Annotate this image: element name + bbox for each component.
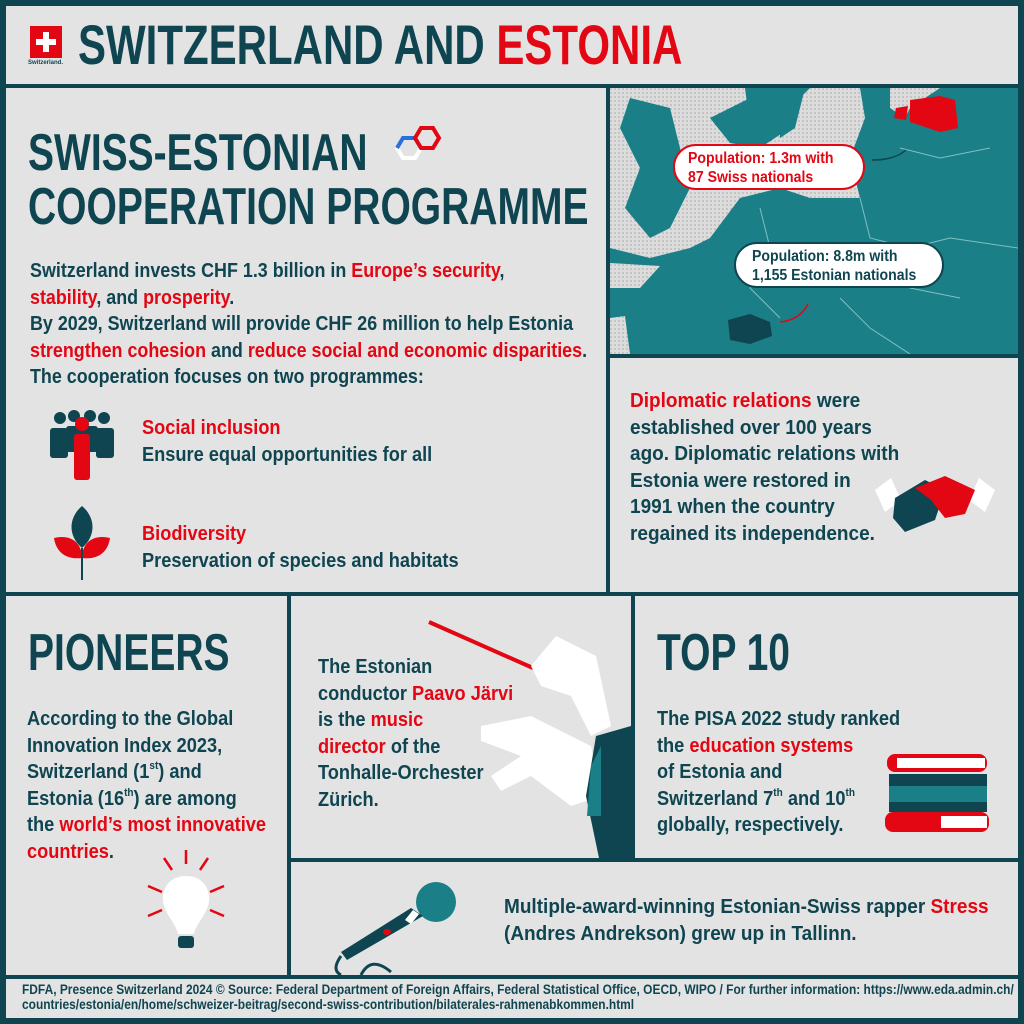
icon: swiss flag logo: Switzerland. — [28, 60, 63, 66]
text block: the education systems — [657, 734, 853, 756]
panel: rapper — [291, 862, 1018, 975]
text block: 1991 when the country — [630, 496, 835, 518]
callout: switzerland population: Population: 8.8m with — [752, 248, 898, 265]
callout: switzerland population — [734, 242, 944, 288]
text block: regained its independence. — [630, 522, 875, 544]
icon: handshake — [875, 476, 995, 532]
callout: estonia population — [673, 144, 865, 190]
text block — [318, 656, 513, 810]
text block: countries. — [27, 840, 114, 862]
icon: linked hexagons — [394, 126, 442, 160]
text block: Zürich. — [318, 788, 379, 810]
text block: intro: The cooperation focuses on two programmes: — [30, 366, 424, 388]
footer — [6, 979, 1018, 1018]
text: social inclusion — [142, 417, 432, 466]
text block: Estonia (16th) are among — [27, 786, 237, 810]
text: social inclusion: Ensure equal opportunities for all — [142, 444, 432, 466]
callout: estonia population: 87 Swiss nationals — [688, 169, 813, 186]
text block: Diplomatic relations were — [630, 390, 860, 412]
icon: books — [885, 754, 989, 832]
text block: ago. Diplomatic relations with — [630, 443, 899, 465]
panel: map — [610, 88, 1018, 354]
heading — [28, 124, 588, 236]
text block: The Estonian — [318, 656, 432, 678]
footer: countries/estonia/en/home/schweizer-beitrag/second-swiss-contribution/bilaterales-rahmenabkommen.html — [22, 997, 634, 1012]
text: biodiversity: Biodiversity — [142, 523, 246, 545]
text block: The PISA 2022 study ranked — [657, 708, 900, 730]
text block: Switzerland (1st) and — [27, 760, 202, 783]
text block: intro: stability, and prosperity. — [30, 286, 234, 308]
callout: estonia population: Population: 1.3m with — [688, 150, 834, 167]
icon: light bulb — [148, 850, 224, 948]
text block: intro: Switzerland invests CHF 1.3 billion in Europe’s security, — [30, 260, 504, 282]
text block — [630, 390, 899, 544]
text block — [657, 708, 900, 836]
text block: According to the Global — [27, 708, 233, 730]
icon: leaf — [54, 506, 110, 580]
text block: intro: strengthen cohesion and reduce social and economic disparities. — [30, 340, 587, 362]
icon: conductor hands — [428, 620, 631, 858]
text block: intro — [30, 260, 587, 388]
heading: SWISS-ESTONIAN — [28, 124, 367, 182]
icon: swiss flag logo — [28, 26, 63, 66]
text block: Multiple-award-winning Estonian-Swiss rapper Stress — [504, 896, 989, 918]
panel: cooperation programme — [6, 88, 606, 592]
icon: people — [50, 410, 114, 480]
text: biodiversity — [142, 523, 459, 572]
title: SWITZERLAND AND ESTONIA — [78, 13, 682, 76]
panel: pioneers — [6, 596, 287, 975]
text block: of Estonia and — [657, 761, 782, 783]
heading: PIONEERS — [28, 624, 230, 682]
text block: Innovation Index 2023, — [27, 734, 222, 756]
heading: COOPERATION PROGRAMME — [28, 178, 588, 236]
heading: TOP 10 — [657, 624, 790, 682]
text block: intro: By 2029, Switzerland will provide CHF 26 million to help Estonia — [30, 313, 573, 335]
text block: Switzerland 7th and 10th — [657, 786, 855, 810]
text block: is the music — [318, 709, 423, 731]
text block: established over 100 years — [630, 416, 872, 438]
map — [610, 88, 1018, 354]
panel: diplomatic relations — [610, 358, 1018, 592]
text block: conductor Paavo Järvi — [318, 682, 513, 704]
text: biodiversity: Preservation of species and habitats — [142, 550, 459, 572]
icon: microphone — [334, 882, 456, 975]
header panel — [6, 6, 1018, 84]
text: social inclusion: Social inclusion — [142, 417, 281, 439]
text block: globally, respectively. — [657, 814, 843, 836]
text block: Estonia were restored in — [630, 470, 851, 492]
text block: director of the — [318, 736, 440, 758]
text block — [27, 708, 266, 862]
text block: (Andres Andrekson) grew up in Tallinn. — [504, 922, 857, 944]
text block — [504, 896, 989, 944]
panel: top 10 — [635, 596, 1018, 858]
text block: Tonhalle-Orchester — [318, 762, 484, 784]
callout: switzerland population: 1,155 Estonian nationals — [752, 267, 916, 284]
text block: the world’s most innovative — [27, 814, 266, 836]
panel: conductor — [291, 596, 631, 858]
footer: FDFA, Presence Switzerland 2024 © Source: Federal Department of Foreign Affairs, Federal Statistical Office, OECD, WIPO / For further information: https://www.eda.admin.ch/ — [22, 982, 1014, 997]
